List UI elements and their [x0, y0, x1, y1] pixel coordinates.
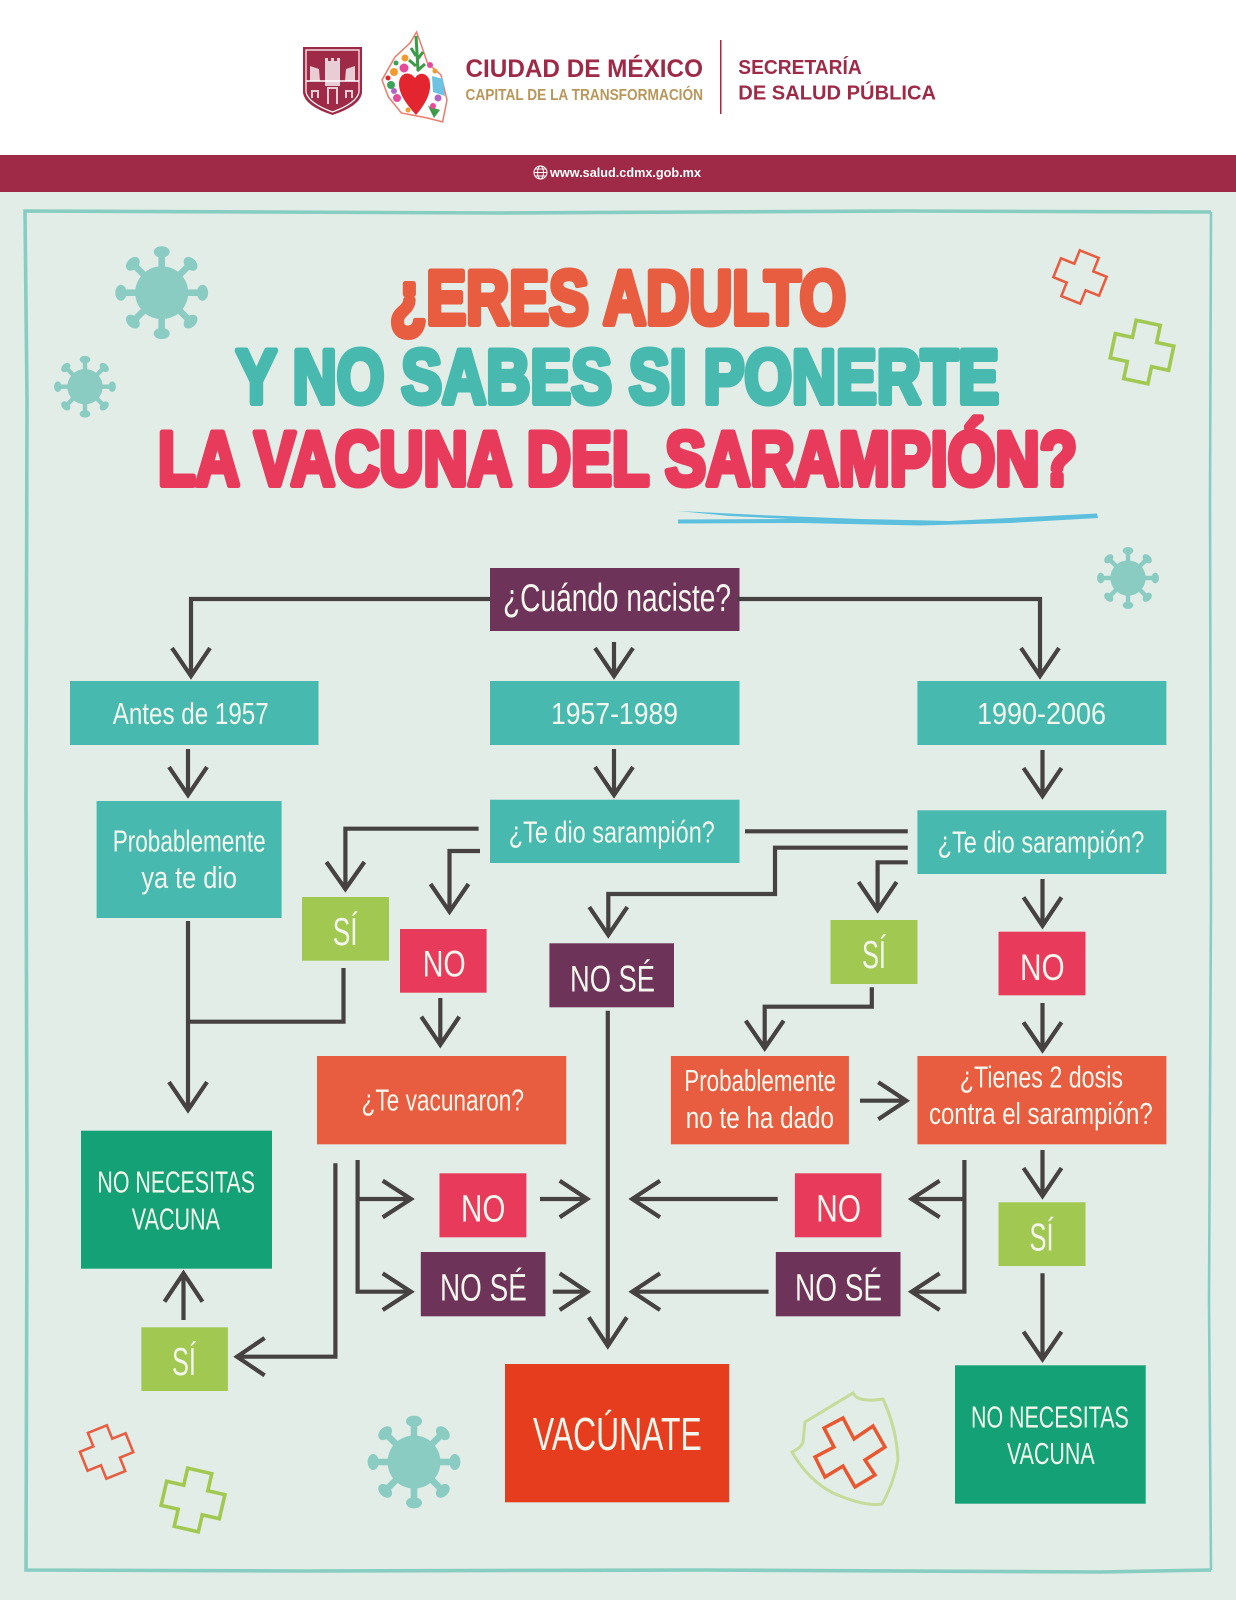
- arrow: naciste to 1957-1989: [595, 642, 633, 676]
- arrow: no left to te vacunaron: [421, 998, 459, 1045]
- arrows: te vacunaron to no and no sé: [358, 1160, 411, 1310]
- box: Vacúnate: [505, 1364, 729, 1502]
- logo text: De Salud Pública: DE SALUD PÚBLICA: [738, 80, 936, 104]
- arrow: 1957-1989 to te dio: [595, 749, 633, 795]
- icon: virus top left: [115, 246, 208, 339]
- arrow: no sé center to vacúnate: [589, 1011, 627, 1346]
- box: No under vaccinated: [440, 1173, 526, 1237]
- box: No necesitas vacuna right: [955, 1365, 1146, 1504]
- arrow: naciste to antes de 1957: [172, 599, 490, 676]
- box: 1957-1989: [490, 681, 740, 745]
- box: Te dio sarampión right: [917, 810, 1166, 874]
- box: No necesitas vacuna right: NO NECESITAS: [971, 1399, 1129, 1434]
- title line 1: ¿ERES ADULTO: [390, 256, 846, 341]
- box: Vacúnate: VACÚNATE: [533, 1408, 702, 1460]
- icon: virus left: [54, 356, 116, 418]
- title: [158, 256, 1077, 502]
- box: No necesitas vacuna left: NO NECESITAS: [97, 1164, 255, 1199]
- box: No sé center: [549, 943, 674, 1007]
- box: Sí bottom left: SÍ: [172, 1341, 196, 1384]
- arrow: right te dio to no right: [1024, 879, 1062, 926]
- arrow: no sé right to vacúnate line: [632, 1273, 768, 1310]
- box: Te dio sarampión center: ¿Te dio sarampión?: [509, 814, 715, 850]
- box: No left: NO: [423, 944, 466, 985]
- icon: green cross bottom left: [157, 1464, 229, 1536]
- arrow: 1990-2006 to te dio: [1024, 750, 1062, 796]
- box: 1990-2006: [917, 681, 1166, 745]
- icon: green cross top right: [1107, 317, 1177, 387]
- arrow: probablemente ya te dio to no necesitas: [169, 921, 207, 1110]
- box: Sí left: SÍ: [333, 911, 358, 954]
- box: Sí right: SÍ: [862, 934, 886, 977]
- box: No sé under doses: NO SÉ: [795, 1267, 882, 1310]
- icon: globe: [534, 166, 547, 179]
- box: Probablemente ya te dio: [97, 801, 282, 918]
- box: Tienes 2 dosis: ¿Tienes 2 dosis: [960, 1059, 1123, 1094]
- arrow: te dio to no left: [430, 851, 480, 912]
- box: No necesitas vacuna left: VACUNA: [132, 1201, 220, 1236]
- title line 2: Y NO SABES SI PONERTE: [236, 335, 999, 420]
- box: Te dio sarampión right: ¿Te dio sarampión?: [938, 824, 1144, 860]
- box: Antes de 1957: [70, 681, 318, 745]
- arrow: no sé to vacúnate line: [553, 1273, 587, 1310]
- arrow: probablemente no to tienes dosis: [860, 1082, 906, 1119]
- box: Te dio sarampión center: [490, 800, 740, 863]
- box: Sí under doses: [998, 1202, 1086, 1266]
- box: Te vacunaron: [317, 1056, 566, 1144]
- logo text: Ciudad de México: CIUDAD DE MÉXICO: [466, 54, 703, 83]
- arrow: naciste to 1990-2006: [737, 599, 1059, 676]
- box: No sé under vaccinated: [421, 1252, 546, 1316]
- box: No necesitas vacuna left: [81, 1131, 272, 1269]
- arrow: sí right to probablemente no: [746, 987, 872, 1048]
- arrow: sí to no necesitas right: [1024, 1273, 1062, 1359]
- connector: sí left to main line: [188, 968, 344, 1022]
- box: Cuándo naciste: [490, 568, 740, 631]
- arrow: no right to vacúnate line: [632, 1181, 778, 1217]
- icon: virus bottom: [368, 1416, 460, 1508]
- logo: embroidered map with heart: [382, 32, 447, 122]
- title underline brush stroke: [678, 511, 1098, 526]
- website text: www.salud.cdmx.gob.mx: [549, 165, 702, 180]
- icon: shield with cross: [792, 1393, 898, 1505]
- box: No under vaccinated: NO: [461, 1189, 505, 1231]
- icon: red cross top right: [1048, 245, 1112, 309]
- box: Te vacunaron: ¿Te vacunaron?: [362, 1082, 524, 1118]
- box: No under doses: [795, 1173, 881, 1237]
- box: Antes de 1957: Antes de 1957: [113, 696, 269, 731]
- box: Probablemente no te ha dado: [671, 1056, 849, 1144]
- box: No right: NO: [1020, 947, 1065, 988]
- arrow: antes de 1957 to probablemente: [169, 749, 207, 795]
- connector: center te dio to right te dio: [745, 829, 908, 833]
- header band with website: [0, 155, 1236, 192]
- box: Probablemente no te ha dado: Probablemente: [684, 1063, 836, 1098]
- box: Sí right: [830, 920, 918, 984]
- arrow: tienes dosis to sí: [1024, 1150, 1062, 1196]
- box: 1957-1989: 1957-1989: [551, 696, 678, 731]
- logo: city shield: [303, 47, 362, 115]
- box: Sí under doses: SÍ: [1030, 1217, 1054, 1260]
- box: No necesitas vacuna right: VACUNA: [1007, 1436, 1095, 1471]
- arrow: te dio to sí left: [326, 829, 479, 889]
- box: Tienes 2 dosis: contra el sarampión?: [929, 1096, 1153, 1131]
- logo text: Capital de la transformación: CAPITAL DE LA TRANSFORMACIÓN: [466, 86, 703, 104]
- box: Probablemente no te ha dado: no te ha dado: [686, 1100, 834, 1135]
- box: Probablemente ya te dio: Probablemente: [113, 824, 266, 858]
- box: Probablemente ya te dio: ya te dio: [141, 860, 237, 895]
- box: Sí bottom left: [141, 1327, 228, 1391]
- box: No right: [998, 932, 1086, 995]
- box: No sé center: NO SÉ: [570, 959, 655, 1000]
- box: No sé under vaccinated: NO SÉ: [440, 1267, 527, 1310]
- arrow: sí bottom left up to no necesitas: [164, 1273, 202, 1320]
- box: Cuándo naciste: ¿Cuándo naciste?: [503, 577, 731, 620]
- box: No under doses: NO: [816, 1189, 861, 1231]
- box: No left: [400, 929, 487, 993]
- arrow: no right to tienes dosis: [1024, 1003, 1062, 1050]
- icon: red cross bottom left: [75, 1420, 139, 1484]
- box: No sé under doses: [776, 1252, 900, 1316]
- box: 1990-2006: 1990-2006: [977, 696, 1106, 731]
- arrow: no to vacúnate line: [540, 1181, 587, 1217]
- box: Tienes 2 dosis: [917, 1056, 1166, 1144]
- arrow: te vacunaron to sí bottom left: [237, 1163, 335, 1375]
- icon: virus right: [1097, 547, 1159, 609]
- arrow: right te dio to no sé: [589, 848, 908, 935]
- arrows: tienes dosis to no and no sé: [912, 1160, 964, 1310]
- header: white logo strip: [0, 0, 1236, 155]
- box: Sí left: [302, 897, 389, 961]
- logo text: Secretaría: SECRETARÍA: [738, 56, 862, 79]
- arrow: right te dio to sí right: [859, 862, 908, 910]
